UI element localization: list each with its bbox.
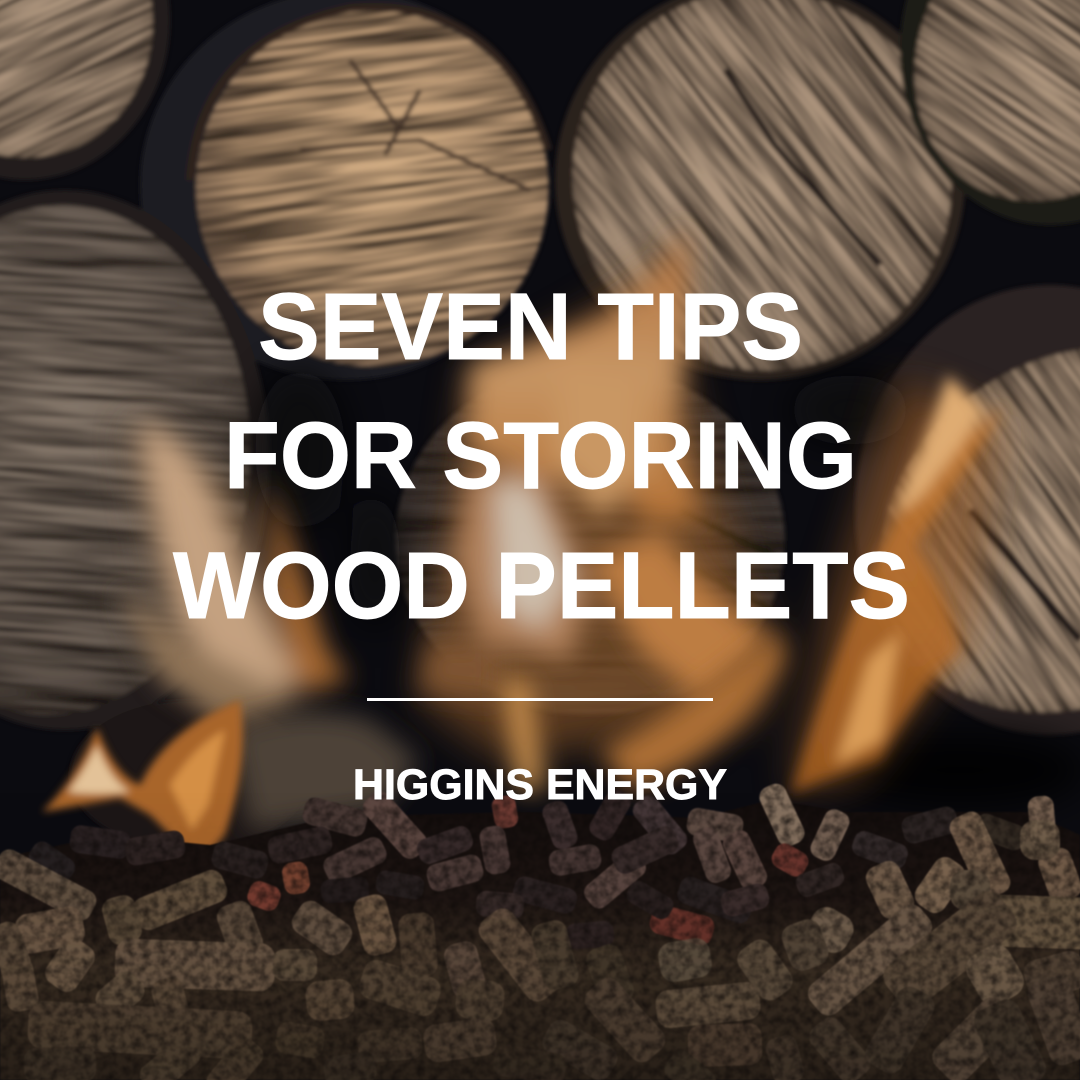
pile base shape bbox=[0, 800, 1080, 1080]
log: top left bbox=[0, 0, 201, 203]
flame: right tongues bbox=[790, 365, 1005, 795]
log: middle right bbox=[810, 273, 1080, 787]
title line 3: WOOD PELLETS bbox=[173, 533, 910, 639]
flame: lower arch bbox=[230, 630, 785, 830]
log: centre back bbox=[395, 365, 785, 715]
photo: stacked logs bbox=[0, 0, 1080, 850]
title bbox=[173, 274, 910, 639]
log: top centre left bbox=[140, 0, 571, 389]
charred pellets bbox=[25, 780, 1057, 950]
log: top right bbox=[855, 0, 1080, 258]
photo: blurred shadow between the logs bbox=[255, 370, 1080, 810]
brand name: HIGGINS ENERGY bbox=[353, 761, 727, 809]
divider line bbox=[367, 698, 713, 701]
flame: soft glow bbox=[130, 260, 1000, 790]
title line 2: FOR STORING bbox=[224, 403, 857, 509]
photo: fire bbox=[42, 225, 1005, 865]
flame: bottom left tongues bbox=[42, 700, 243, 865]
wood pellets: centre bbox=[287, 892, 876, 1080]
title line 1: SEVEN TIPS bbox=[258, 274, 803, 380]
pellet shading bbox=[0, 790, 1080, 1080]
log: middle left bbox=[0, 190, 270, 730]
wood pellets: right side bbox=[778, 808, 1080, 1080]
log: bottom left edge bbox=[70, 700, 310, 850]
flame: left sweep bbox=[120, 420, 350, 720]
flame: central column bbox=[420, 225, 770, 700]
wood pellets: left side bbox=[0, 846, 326, 1080]
log: top centre right bbox=[496, 0, 1028, 447]
pellet pile bbox=[0, 780, 1080, 1080]
